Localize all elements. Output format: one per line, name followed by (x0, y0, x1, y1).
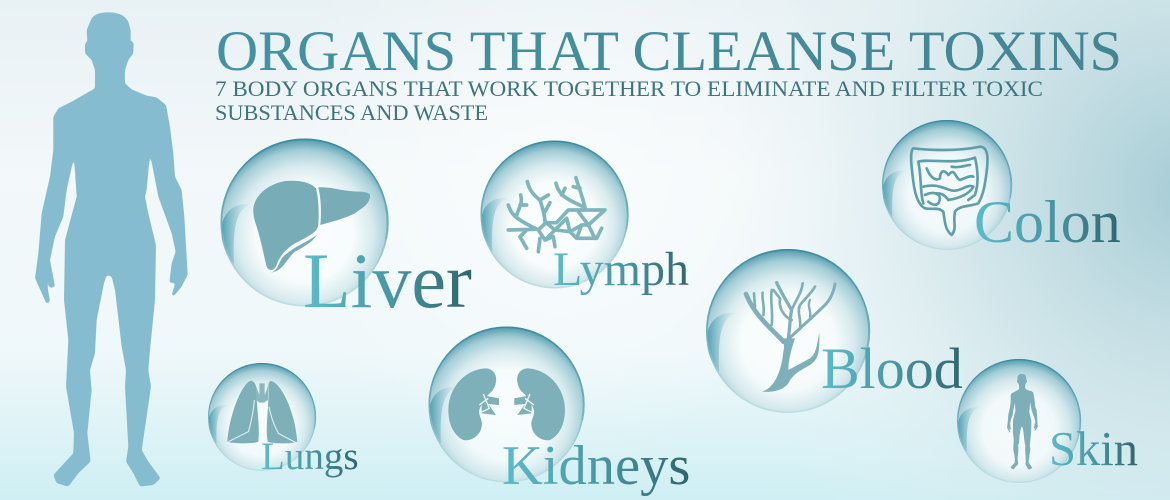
panel: blood (706, 249, 870, 413)
icon: blood vessel tree (746, 283, 835, 392)
label: kidneys: Kidneys (502, 435, 690, 497)
panel: lungs (208, 363, 316, 471)
panel: skin (957, 359, 1081, 483)
label: lymph: Lymph (553, 243, 689, 296)
title: ORGANS THAT CLEANSE TOXINS (216, 20, 1122, 83)
subtitle: SUBSTANCES AND WASTE (215, 100, 488, 125)
panel: kidneys (428, 326, 584, 482)
label: skin: Skin (1049, 423, 1138, 476)
icon: liver (253, 181, 370, 273)
label: colon: Colon (974, 189, 1121, 255)
icon: lymph vessels (508, 178, 605, 252)
panel: liver (220, 138, 388, 306)
panel: colon (882, 120, 1012, 250)
label: blood: Blood (821, 336, 963, 401)
label: lungs: Lungs (261, 435, 358, 478)
label: liver: Liver (303, 237, 472, 324)
icon: lungs (227, 381, 297, 443)
subtitle (215, 76, 1043, 125)
human body silhouette (35, 12, 188, 487)
icon: colon (911, 147, 988, 235)
panel: lymph (480, 140, 628, 288)
icon: human figure (1007, 374, 1038, 469)
icon: kidneys (448, 368, 565, 440)
subtitle: 7 BODY ORGANS THAT WORK TOGETHER TO ELIMINATE AND FILTER TOXIC (215, 76, 1043, 101)
